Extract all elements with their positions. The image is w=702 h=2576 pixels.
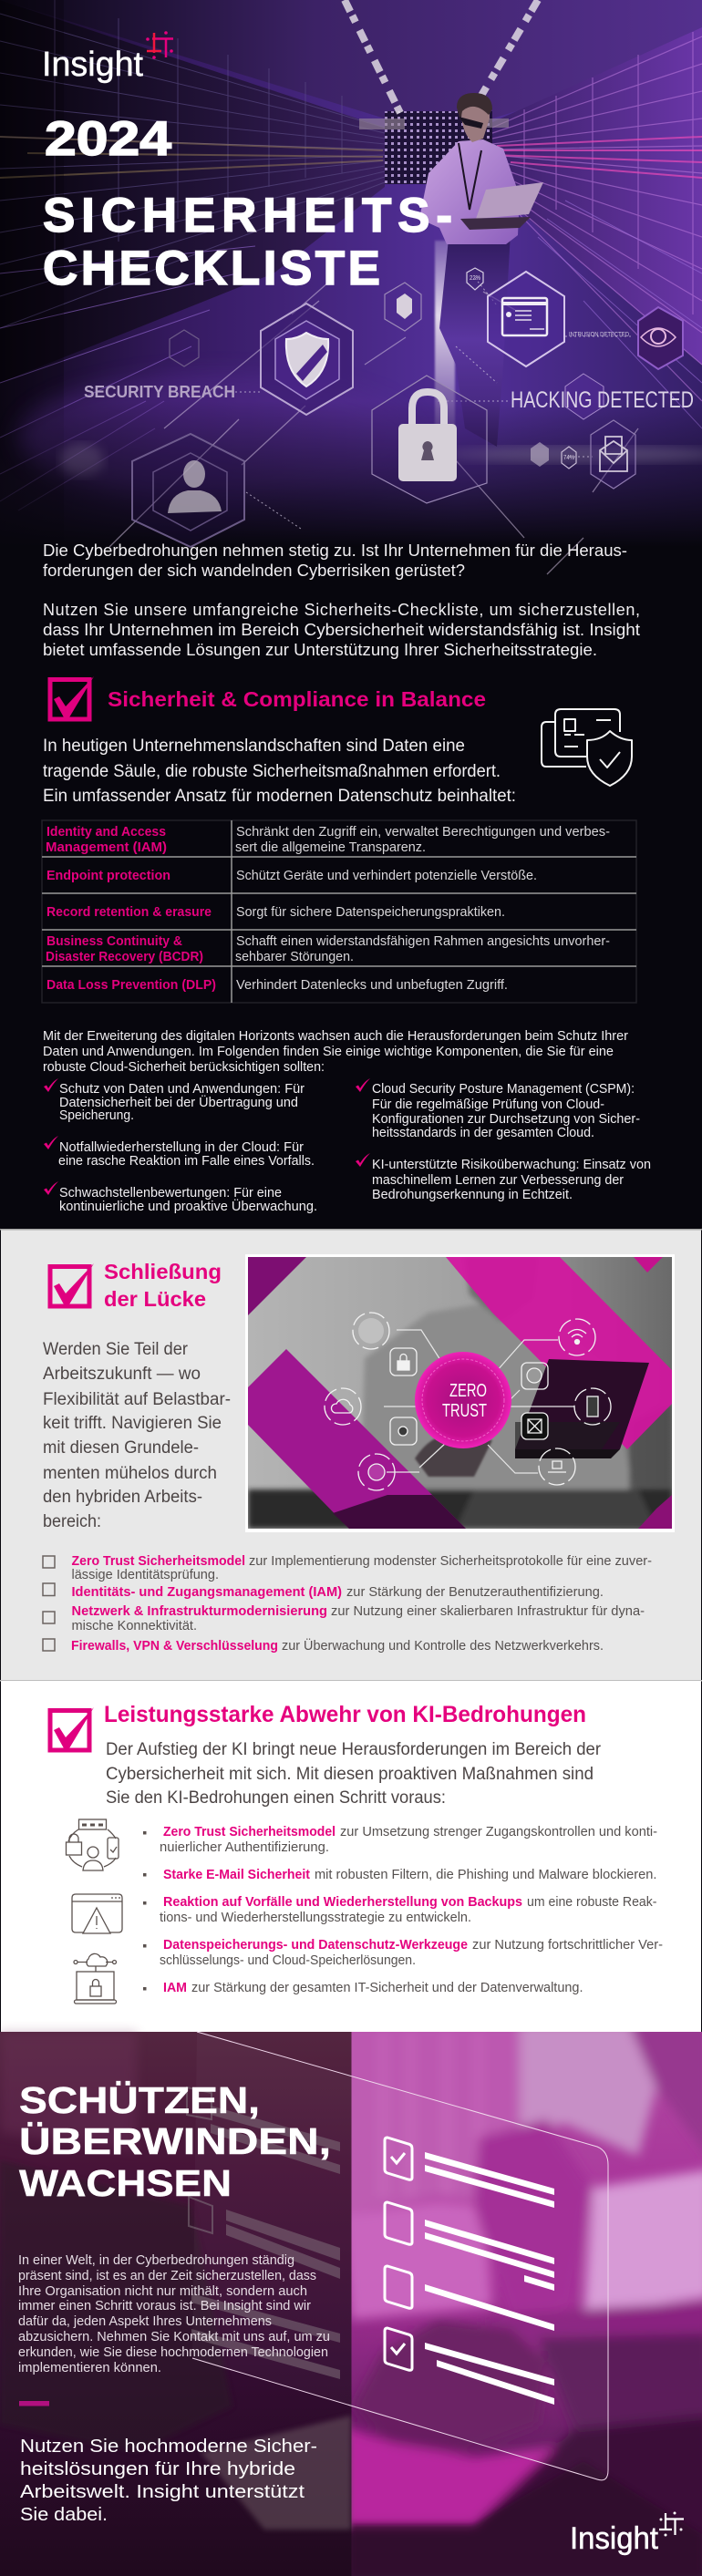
text block: bereich: — [43, 1512, 101, 1531]
center circle — [415, 1352, 511, 1448]
text block: Sie den KI-Bedrohungen einen Schritt voraus: — [106, 1788, 446, 1808]
heading: ÜBERWINDEN, — [19, 2120, 331, 2162]
panel: Sicherheit & Compliance — [42, 676, 636, 1003]
hand — [415, 1435, 492, 1477]
title — [43, 112, 452, 295]
table — [42, 820, 636, 1003]
icon: check box — [50, 676, 94, 719]
text block — [106, 1740, 602, 1808]
panel: closing photo — [0, 2024, 702, 2576]
text block: präsent sind, ist es an der Zeit sicherzustellen, dass — [18, 2269, 316, 2283]
hero image captions: 74% — [563, 455, 574, 461]
table: Endpoint protection — [46, 869, 170, 883]
icon: eye hexagon — [638, 307, 683, 369]
text block: Werden Sie Teil der — [43, 1340, 189, 1359]
checklist descriptions: zur Stärkung der Benutzerauthentifizierung. — [346, 1585, 604, 1600]
logo: Insight bottom — [570, 2512, 684, 2556]
left dark overlay — [0, 2032, 352, 2576]
decorative small hexagons — [170, 268, 604, 469]
icon: ticks — [44, 1078, 370, 1195]
checklist right: maschinellem Lernen zur Verbesserung der — [372, 1172, 624, 1188]
title: SICHERHEITS- — [43, 189, 452, 242]
checklist pink terms: Netzwerk & Infrastrukturmodernisierung — [71, 1604, 327, 1619]
person with laptop — [418, 93, 543, 447]
intro text: Nutzen Sie unsere umfangreiche Sicherheits-Checkliste, um sicherzustellen, — [43, 601, 640, 619]
panel: Leistungsstarke Abwehr von KI-Bedrohungen — [1, 1681, 701, 2032]
checklist graphic — [385, 2138, 554, 2405]
checklist descriptions — [71, 1554, 652, 1654]
image: zero trust — [245, 1254, 675, 1532]
checklist left: eine rasche Reaktion im Falle eines Vorfalls. — [58, 1153, 315, 1169]
checklist pink terms: Firewalls, VPN & Verschlüsselung — [71, 1639, 278, 1654]
text block: Der Aufstieg der KI bringt neue Herausforderungen im Bereich der — [106, 1740, 602, 1759]
text block: menten mühelos durch — [43, 1464, 217, 1483]
text block — [18, 2253, 330, 2375]
icon: check box — [50, 1263, 94, 1306]
checklist left: Speicherung. — [59, 1108, 134, 1123]
intro text — [43, 541, 640, 659]
title: CHECKLISTE — [43, 242, 380, 295]
ghost laptop in overlay — [0, 2032, 351, 2530]
text block: Ihre Organisation nicht nur mithält, sondern auch — [18, 2284, 307, 2299]
bullet list — [143, 1824, 663, 1995]
logo: Insight top — [42, 31, 173, 84]
heading: SCHÜTZEN, — [19, 2079, 260, 2121]
icon: card hexagon — [488, 272, 564, 366]
table: Schränkt den Zugriff ein, verwaltet Berechtigungen und verbes- — [236, 825, 610, 840]
call to action: Arbeitswelt. Insight unterstützt — [20, 2482, 305, 2502]
table: Sorgt für sichere Datenspeicherungspraktiken. — [236, 905, 505, 920]
list descriptions — [160, 1824, 663, 1995]
icon: shield hexagon — [261, 304, 353, 415]
text block: Flexibilität auf Belastbar- — [43, 1390, 231, 1409]
checklist descriptions: zur Nutzung einer skalierbaren Infrastruktur für dyna- — [331, 1604, 645, 1619]
connector lines — [384, 1330, 574, 1473]
list pink terms: Datenspeicherungs- und Datenschutz-Werkzeuge — [163, 1937, 468, 1953]
hero image captions: 22% — [470, 275, 480, 282]
text block: Daten und Anwendungen. Im Folgenden finden Sie einige wichtige Komponenten, die Sie für eine — [43, 1045, 614, 1059]
label: zero trust: TRUST — [442, 1401, 487, 1421]
checklist left: Schutz von Daten und Anwendungen: Für — [59, 1081, 305, 1097]
text block: keit trifft. Navigieren Sie — [43, 1414, 222, 1433]
heading: Leistungsstarke Abwehr von KI-Bedrohungen — [104, 1702, 586, 1727]
list pink terms: IAM — [163, 1980, 187, 1995]
table: sert die allgemeine Transparenz. — [235, 840, 426, 855]
list descriptions: nuierlicher Authentifizierung. — [160, 1839, 329, 1855]
list descriptions: mit robusten Filtern, die Phishing und Malware blockieren. — [315, 1867, 656, 1882]
heading — [19, 2079, 331, 2204]
icon: check box — [50, 1707, 94, 1750]
checklist right: Bedrohungserkennung in Echtzeit. — [372, 1187, 573, 1202]
table: Business Continuity & — [46, 934, 183, 949]
checklist descriptions: lässige Identitätsprüfung. — [71, 1568, 219, 1582]
tablet — [515, 1359, 649, 1449]
intro text: Die Cyberbedrohungen nehmen stetig zu. Ist Ihr Unternehmen für die Heraus- — [43, 541, 627, 560]
text block: erkunden, wie Sie diese hochmodernen Technologien — [18, 2345, 328, 2360]
bullets — [143, 1831, 146, 1991]
checklist descriptions: zur Überwachung und Kontrolle des Netzwerkverkehrs. — [282, 1637, 604, 1654]
text block: immer einen Schritt voraus ist. Bei Insight sind wir — [18, 2299, 311, 2313]
hero image captions: SECURITY BREACH — [84, 383, 235, 401]
text block: Ein umfassender Ansatz für modernen Datenschutz beinhaltet: — [43, 787, 516, 806]
table: Verhindert Datenlecks und unbefugten Zugriff. — [236, 978, 508, 993]
checklist pink terms: Zero Trust Sicherheitsmodel — [71, 1554, 245, 1569]
hexagon network lines — [109, 283, 638, 574]
text block — [43, 737, 516, 806]
list descriptions: um eine robuste Reak- — [527, 1894, 656, 1910]
checklist descriptions: zur Implementierung modenster Sicherheitsprotokolle für eine zuver- — [249, 1554, 652, 1569]
text block: Cybersicherheit mit sich. Mit diesen proaktiven Maßnahmen sind — [106, 1765, 594, 1784]
table: Disaster Recovery (BCDR) — [46, 950, 203, 964]
table: Record retention & erasure — [46, 905, 212, 920]
call to action: Nutzen Sie hochmoderne Sicher- — [20, 2437, 317, 2457]
call to action: heitslösungen für Ihre hybride — [20, 2459, 295, 2479]
photo: hand and laptop with checklist — [352, 2032, 702, 2576]
text block: dafür da, jeden Aspekt Ihres Unternehmens — [18, 2314, 272, 2329]
list pink terms — [163, 1824, 522, 1995]
call to action — [20, 2437, 317, 2525]
icon: padlock — [372, 376, 487, 503]
panel: cloud security — [43, 1029, 651, 1214]
list descriptions: tions- und Wiederherstellungsstrategie zu entwickeln. — [160, 1910, 471, 1925]
checklist left: Datensicherheit bei der Übertragung und — [59, 1094, 298, 1110]
glass panel outline — [192, 2032, 608, 2480]
list pink terms: Reaktion auf Vorfälle und Wiederherstellung von Backups — [163, 1894, 522, 1910]
title: 2024 — [45, 112, 172, 166]
text block: Arbeitszukunft — wo — [43, 1365, 201, 1384]
checklist pink terms: Identitäts- und Zugangsmanagement (IAM) — [71, 1585, 342, 1600]
text block — [43, 1340, 231, 1531]
label: zero trust — [442, 1381, 487, 1421]
table: Schafft einen widerstandsfähigen Rahmen angesichts unvorher- — [236, 934, 610, 949]
icon: user hexagon — [132, 434, 244, 547]
icon: cloud lock laptop — [74, 1953, 117, 2004]
text block: mit diesen Grundele- — [43, 1438, 199, 1458]
icon: identity access ring — [66, 1819, 119, 1870]
accent dash — [19, 2401, 49, 2406]
hero photo: data center with security icons — [0, 0, 702, 574]
text block: In einer Welt, in der Cyberbedrohungen ständig — [18, 2253, 294, 2268]
list descriptions: zur Stärkung der gesamten IT-Sicherheit und der Datenverwaltung. — [191, 1980, 583, 1995]
heading: WACHSEN — [19, 2162, 232, 2204]
text block: den hybriden Arbeits- — [43, 1488, 202, 1507]
list pink terms: Starke E-Mail Sicherheit — [163, 1867, 310, 1882]
checklist right: Cloud Security Posture Management (CSPM): — [372, 1081, 635, 1097]
table: Management (IAM) — [46, 840, 167, 855]
list descriptions: zur Umsetzung strenger Zugangskontrollen und konti- — [340, 1824, 657, 1839]
checklist right: Konfigurationen zur Durchsetzung von Sicher- — [372, 1111, 640, 1127]
text block: Mit der Erweiterung des digitalen Horizonts wachsen auch die Herausforderungen beim Schutz Ihrer — [43, 1029, 628, 1044]
text block: In heutigen Unternehmenslandschaften sind Daten eine — [43, 737, 465, 756]
intro text: dass Ihr Unternehmen im Bereich Cybersicherheit widerstandsfähig ist. Insight — [43, 621, 640, 639]
check boxes — [385, 2138, 412, 2179]
icon: mail hexagon — [591, 420, 635, 489]
icon: document with shield — [542, 709, 632, 786]
checklist right — [372, 1081, 651, 1202]
call to action: Sie dabei. — [20, 2505, 108, 2525]
hero image captions: INTRUSION DETECTED — [569, 332, 629, 338]
checklist descriptions: mische Konnektivität. — [71, 1619, 197, 1633]
text block — [43, 1029, 628, 1075]
intro text: forderungen der sich wandelnden Cyberrisiken gerüstet? — [43, 562, 465, 580]
checklist left: kontinuierliche und proaktive Überwachung. — [59, 1198, 317, 1214]
checklist left — [58, 1081, 317, 1214]
pink bands — [248, 1257, 306, 1315]
hero image captions — [84, 275, 694, 461]
heading — [104, 1260, 222, 1311]
logo: Insight top: Insight — [42, 46, 143, 84]
checklist right: heitsstandards in der gesamten Cloud. — [372, 1125, 594, 1140]
checklist left: Notfallwiederherstellung in der Cloud: Für — [59, 1139, 304, 1155]
heading: Sicherheit & Compliance in Balance — [108, 687, 486, 711]
table: sehbarer Störungen. — [235, 950, 354, 964]
table: Schützt Geräte und verhindert potenzielle Verstöße. — [236, 869, 537, 883]
icon: empty check boxes — [43, 1556, 55, 1651]
icon: warning window — [72, 1894, 122, 1933]
checklist right: KI-unterstützte Risikoüberwachung: Einsatz von — [372, 1157, 651, 1172]
heading: der Lücke — [104, 1287, 206, 1311]
text block: robuste Cloud-Sicherheit berücksichtigen sollten: — [43, 1060, 325, 1075]
list pink terms: Zero Trust Sicherheitsmodel — [163, 1824, 336, 1839]
heading: Schließung — [104, 1260, 222, 1283]
small icons — [325, 1313, 611, 1490]
list lines — [425, 2152, 554, 2405]
label: zero trust: ZERO — [449, 1381, 487, 1401]
text block: implementieren können. — [18, 2361, 161, 2375]
logo: Insight bottom: Insight — [570, 2521, 659, 2556]
table: Data Loss Prevention (DLP) — [46, 978, 216, 993]
checklist — [43, 1554, 652, 1654]
person silhouette — [248, 1257, 672, 1529]
checklist pink terms — [71, 1554, 342, 1654]
checklist left: Schwachstellenbewertungen: Für eine — [59, 1185, 282, 1200]
list descriptions: schlüsselungs- und Cloud-Speicherlösungen. — [160, 1953, 416, 1968]
text block: abzusichern. Nehmen Sie Kontakt mit uns auf, um zu — [18, 2330, 330, 2344]
intro text: bietet umfassende Lösungen zur Unterstützung Ihrer Sicherheitsstrategie. — [43, 641, 597, 659]
list descriptions: zur Nutzung fortschrittlicher Ver- — [472, 1937, 663, 1953]
text block: tragende Säule, die robuste Sicherheitsmaßnahmen erfordert. — [43, 762, 501, 781]
panel: Schließung der Lücke — [0, 1229, 702, 1681]
table: Identity and Access — [46, 825, 166, 840]
checklist right: Für die regelmäßige Prüfung von Cloud- — [372, 1097, 604, 1112]
